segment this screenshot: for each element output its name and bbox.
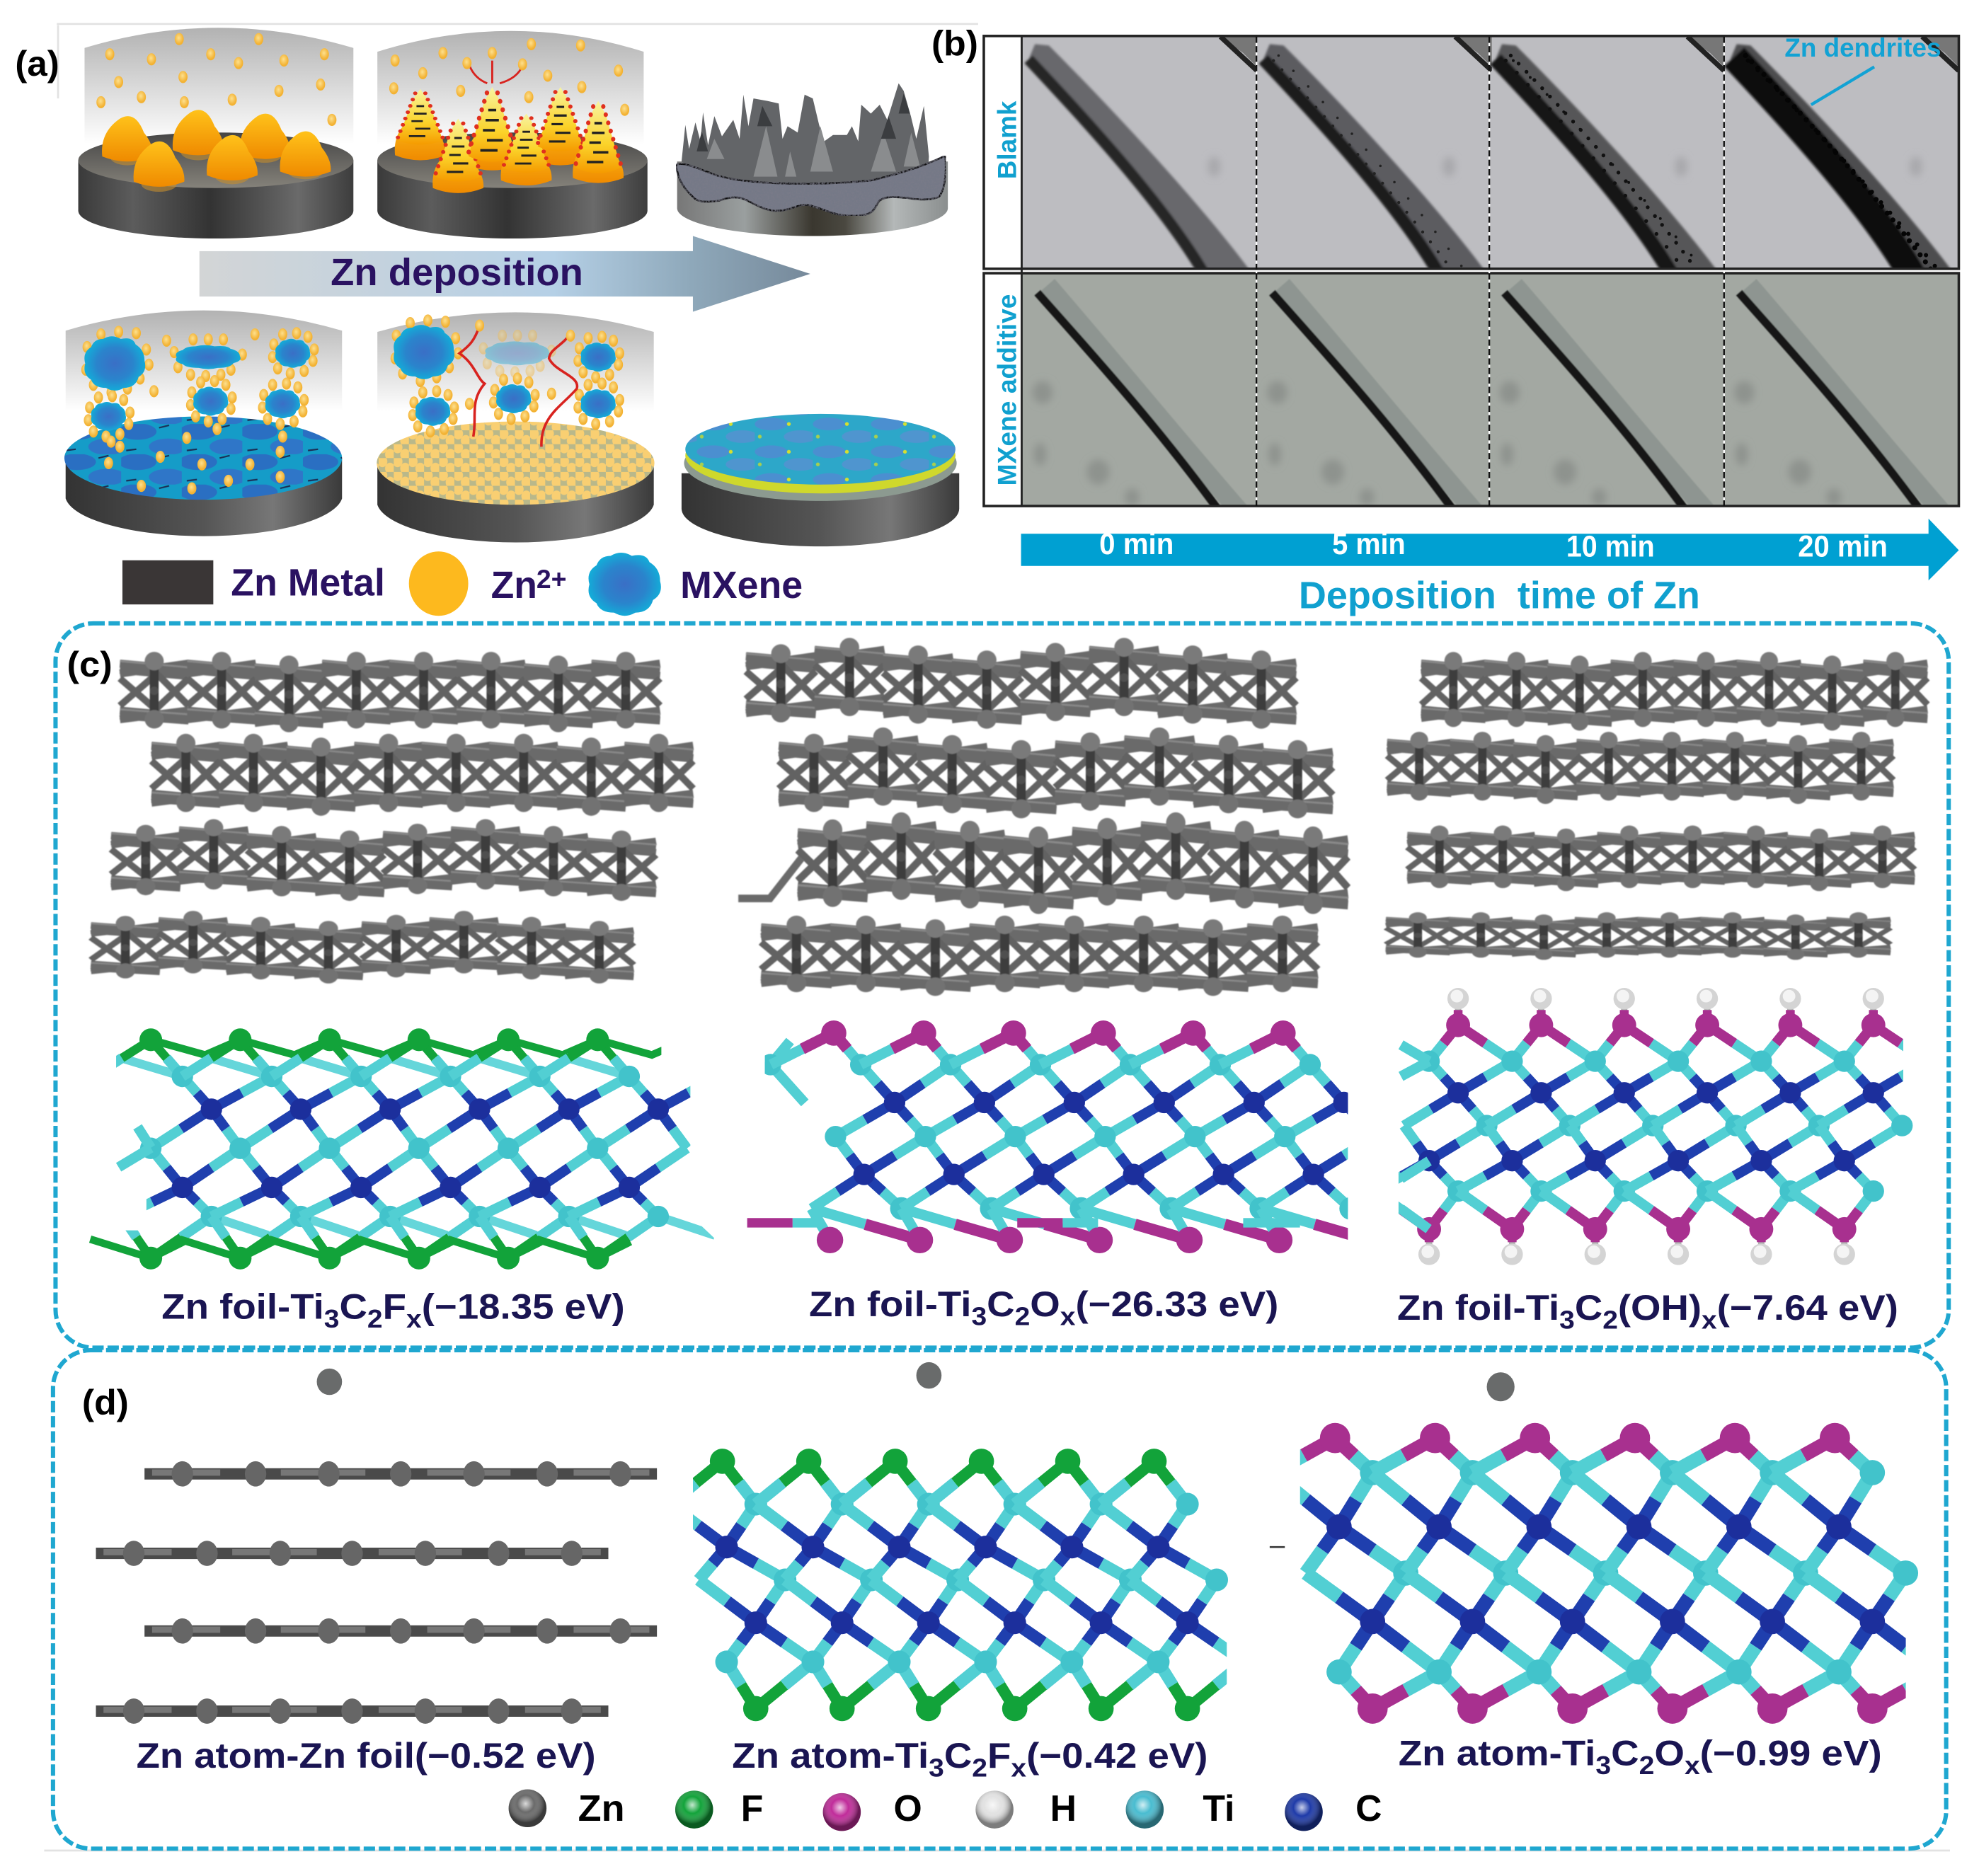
cell 1: bare Zn with mounds (79, 28, 353, 238)
callout: Zn dendrites (1784, 33, 1941, 105)
callout: Zn dendrites: Zn dendrites (1784, 33, 1941, 62)
row label: Blamk: Blamk (992, 100, 1021, 179)
caption: Zn atom-Ti3C2Ox: Zn atom-Ti (1399, 1734, 1578, 1773)
legend: atom colours (509, 1788, 1382, 1831)
frame 10 min (1496, 37, 1726, 280)
caption: Zn foil-Ti3C2Fx: F (383, 1287, 406, 1326)
dashed frame c (55, 623, 1949, 1347)
image frames and time separators (984, 35, 1958, 506)
caption: Zn atom-Ti3C2Fx: 2 (972, 1754, 987, 1783)
caption: Zn foil-Ti3C2Fx: 3 (324, 1305, 339, 1333)
caption: Zn atom-Ti3C2Ox: O (1654, 1734, 1685, 1773)
caption: Zn foil-Ti3C2Fx: 2 (367, 1305, 383, 1333)
caption: Zn foil-Ti3C2(OH)x: (OH) (1618, 1288, 1702, 1328)
panel d: Zn atom adsorption (53, 1350, 1946, 1848)
caption: Zn foil-Ti3C2Ox: 2 (1015, 1302, 1030, 1330)
arrow: time axis with min labels: 20 min (1798, 529, 1888, 563)
caption: Zn foil-Ti3C2(OH)x: C (1575, 1288, 1602, 1328)
frame MXene 20 min (1734, 285, 1941, 511)
caption: Zn atom-Ti3C2Ox: 2 (1639, 1751, 1654, 1780)
frame MXene 10 min (1499, 285, 1706, 511)
arrow: time axis with min labels (1021, 519, 1958, 580)
legend: Zn metal, Zn2+, MXene: 2+ (537, 564, 567, 594)
caption: Zn atom-Ti3C2Ox: 3 (1595, 1751, 1611, 1780)
caption: Zn atom-Ti3C2Fx: C (944, 1736, 972, 1776)
caption: Zn foil-Ti3C2(OH)x: 3 (1559, 1306, 1575, 1335)
arrow: Zn deposition (200, 236, 810, 311)
row: blank electrolyte images (1022, 37, 1960, 280)
caption: Zn foil-Ti3C2Fx: Zn foil-Ti (161, 1287, 310, 1326)
legend: Zn metal, Zn2+, MXene: Zn (491, 565, 537, 606)
legend: Zn metal, Zn2+, MXene: MXene (680, 565, 803, 606)
legend: atom colours: Zn (578, 1788, 625, 1829)
caption: Zn atom-Ti3C2Fx: F (987, 1736, 1011, 1776)
caption: Zn atom-Ti3C2Fx: 3 (929, 1754, 944, 1783)
panel c: Zn foil on MXene terminations (55, 623, 1949, 1347)
caption: Zn foil-Ti3C2Ox: Zn foil-Ti (809, 1284, 958, 1324)
caption: Zn foil-Ti3C2(OH)x: 2 (1602, 1306, 1618, 1335)
caption: Zn foil-Ti3C2Ox: x (1060, 1302, 1076, 1330)
caption: Zn foil-Ti3C2Ox: O (1030, 1284, 1060, 1324)
caption: Zn foil-Ti3C2Ox: C (987, 1284, 1015, 1324)
frame 0 min (1028, 37, 1258, 280)
structure: Zn foil on Ti3C2Fx (90, 652, 718, 1270)
legend: atom colours: Ti (1203, 1788, 1234, 1829)
caption: Zn foil-Ti3C2Fx: (−18.35 eV) (422, 1287, 625, 1326)
caption: Zn foil-Ti3C2Ox: 3 (971, 1302, 987, 1330)
frame MXene 0 min (1033, 285, 1239, 511)
cell 6: uniform MXene protected Zn (682, 414, 959, 546)
caption: Zn foil-Ti3C2(OH)x: x (1702, 1306, 1717, 1335)
row: MXene additive images (1022, 274, 1958, 511)
legend: Zn metal, Zn2+, MXene: Zn Metal (231, 563, 385, 604)
caption: Zn atom-Zn foil: Zn atom-Zn foil(−0.52 eV) (137, 1736, 596, 1776)
legend: Zn metal, Zn2+, MXene (122, 551, 803, 616)
caption: Zn foil-Ti3C2(OH)x: (−7.64 eV) (1717, 1288, 1898, 1328)
legend: atom colours: C (1355, 1788, 1382, 1829)
panel label b: (b) (931, 23, 978, 63)
panel label a: (a) (15, 44, 59, 84)
caption: Zn foil-Ti3C2Ox: (−26.33 eV) (1076, 1284, 1278, 1324)
stray tick mark (1270, 1546, 1285, 1548)
panel label c: (c) (67, 645, 113, 684)
caption: Zn atom-Ti3C2Ox: x (1685, 1751, 1700, 1780)
structure: Zn atom on Ti3C2Fx (670, 1362, 1244, 1721)
structure: Zn atom on Ti3C2Ox (1273, 1372, 1939, 1724)
axis title: deposition time: Deposition time of Zn (1299, 575, 1700, 616)
arrow: Zn deposition: Zn deposition (331, 252, 583, 294)
panel label d: (d) (82, 1383, 129, 1422)
legend: atom colours: O (893, 1788, 922, 1829)
arrow: time axis with min labels: 10 min (1566, 529, 1655, 563)
legend: atom colours: F (741, 1788, 763, 1829)
cell 2: charged cones with field lines (377, 31, 648, 238)
panel a: Zn deposition schematic (15, 28, 959, 616)
caption: Zn foil-Ti3C2(OH)x: Zn foil-Ti (1397, 1288, 1546, 1328)
panel b: in situ optical images (931, 23, 1960, 616)
caption: Zn atom-Ti3C2Ox: C (1611, 1734, 1639, 1773)
legend: atom colours: H (1050, 1788, 1077, 1829)
frame MXene 5 min (1267, 285, 1474, 511)
arrow: time axis with min labels: 5 min (1332, 527, 1406, 561)
caption: Zn atom-Ti3C2Fx: x (1011, 1754, 1026, 1783)
cell 5: Zn2+ layer with guided field (377, 312, 655, 543)
frame 5 min (1263, 37, 1493, 280)
caption: Zn foil-Ti3C2Fx: x (406, 1305, 422, 1333)
caption: Zn foil-Ti3C2Fx: C (339, 1287, 367, 1326)
frame 20 min (1731, 37, 1960, 280)
cell 3: dendrite covered Zn (676, 84, 948, 236)
structure: Zn atom on Zn foil (96, 1369, 657, 1724)
caption: Zn atom-Ti3C2Fx: Zn atom-Ti (732, 1736, 912, 1776)
cell 4: MXene on Zn (64, 311, 342, 536)
caption: Zn atom-Ti3C2Fx: (−0.42 eV) (1026, 1736, 1208, 1776)
dashed frame d (53, 1350, 1946, 1848)
structure: Zn foil on Ti3C2(OH)x (1375, 652, 1927, 1265)
arrow: time axis with min labels: 0 min (1099, 527, 1174, 561)
caption: Zn atom-Ti3C2Ox: (−0.99 eV) (1700, 1734, 1882, 1773)
structure: Zn foil on Ti3C2Ox (738, 638, 1400, 1253)
row label: MXene additive: MXene additive (992, 294, 1021, 486)
